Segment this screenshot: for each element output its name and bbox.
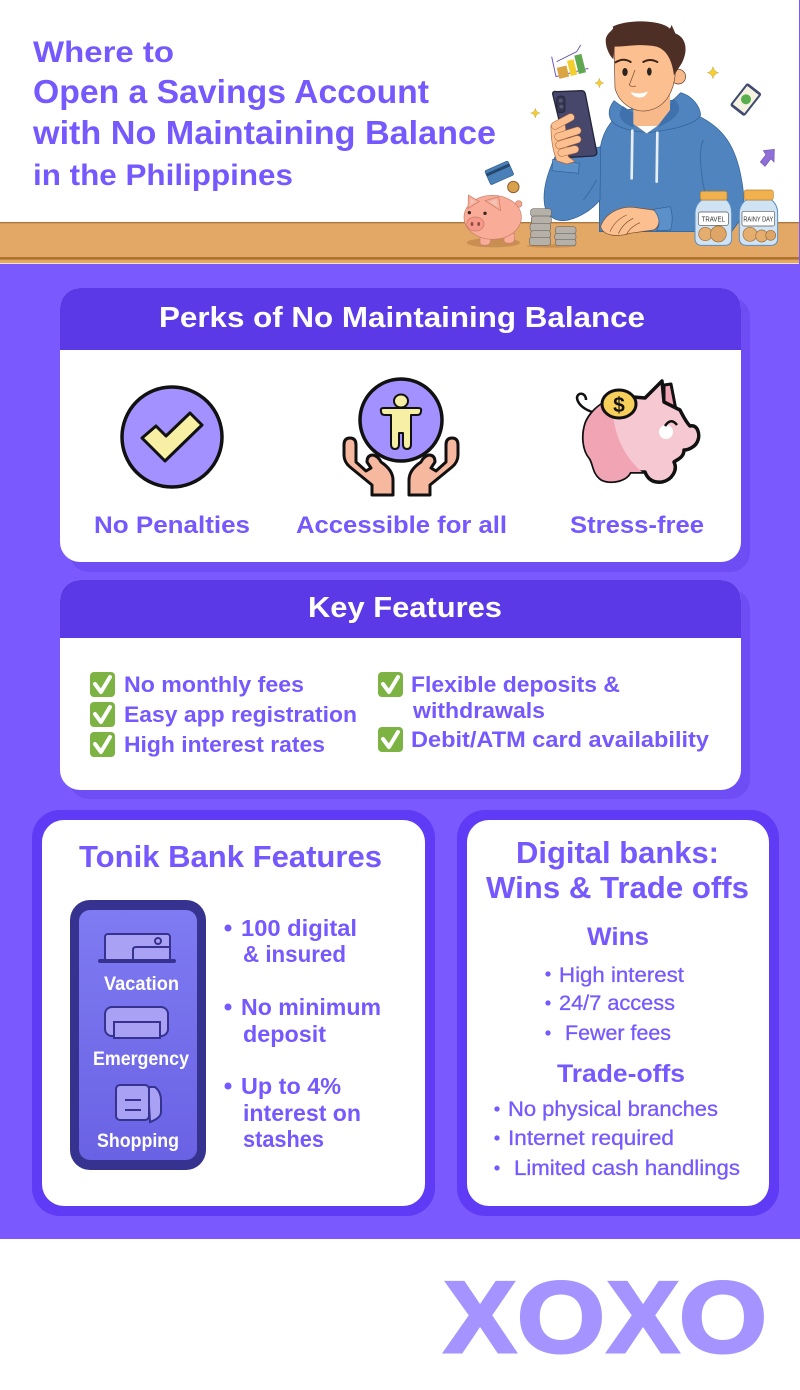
text: wins list bbox=[546, 964, 684, 1045]
jar: rainy day bbox=[739, 190, 778, 245]
text: wins list: High interest bbox=[559, 964, 684, 987]
text: tonik feature list: interest on bbox=[243, 1100, 361, 1126]
icon: piggy bank with coin bbox=[577, 381, 699, 482]
subheading: wins: Wins bbox=[587, 923, 649, 951]
text: features left column: No monthly fees bbox=[124, 672, 304, 697]
label: vacation: Vacation bbox=[104, 974, 179, 995]
jar: rainy day: RAINY DAY bbox=[743, 217, 774, 224]
icon: purple arrow bbox=[760, 149, 774, 166]
panel: tonik bank features bbox=[32, 810, 435, 1216]
text: tonik feature list: & insured bbox=[243, 941, 346, 967]
heading: digital banks bbox=[486, 835, 749, 905]
text: tonik feature list: deposit bbox=[243, 1021, 326, 1047]
logo: XOXO: O bbox=[679, 1262, 767, 1374]
icon: piggy bank with coin: $ bbox=[613, 394, 625, 417]
text: tonik feature list: stashes bbox=[243, 1126, 324, 1152]
label: shopping: Shopping bbox=[97, 1131, 179, 1152]
icon: shopping bbox=[116, 1085, 161, 1122]
heading: tonik bank features: Tonik Bank Features bbox=[79, 839, 382, 874]
icon: check circle bbox=[122, 387, 222, 487]
text: features left column bbox=[124, 672, 357, 757]
panel: digital banks wins and trade-offs bbox=[457, 810, 779, 1216]
text: features left column: Easy app registration bbox=[124, 702, 357, 727]
heading: perks: Perks of No Maintaining Balance bbox=[159, 302, 645, 334]
logo: XOXO bbox=[444, 1262, 767, 1374]
jar: travel: TRAVEL bbox=[702, 217, 725, 224]
text: tonik feature list: No minimum bbox=[241, 994, 381, 1020]
logo: XOXO: O bbox=[517, 1262, 605, 1374]
icon: small phone bbox=[730, 83, 762, 117]
text: features left column: High interest rates bbox=[124, 732, 325, 757]
title bbox=[32, 36, 496, 192]
table bbox=[0, 222, 799, 263]
title: with No Maintaining Balance bbox=[32, 114, 496, 151]
text: tonik feature list: Up to 4% bbox=[241, 1073, 341, 1099]
jar: travel bbox=[695, 191, 732, 245]
icon: check boxes bbox=[90, 672, 403, 757]
icon: vacation bbox=[100, 934, 174, 961]
man bbox=[544, 21, 744, 235]
subheading: trade-offs: Trade-offs bbox=[557, 1060, 685, 1088]
coin stacks bbox=[526, 209, 576, 248]
heading: digital banks: Wins & Trade offs bbox=[486, 870, 749, 905]
phone mockup with stashes bbox=[70, 900, 206, 1170]
icon: coin bbox=[508, 181, 519, 193]
title: in the Philippines bbox=[33, 159, 293, 192]
icon: growth chart bbox=[552, 45, 588, 79]
text: trade-offs list: No physical branches bbox=[508, 1098, 718, 1121]
icon: hands holding accessibility figure bbox=[344, 379, 458, 495]
heading: key features: Key Features bbox=[308, 592, 502, 624]
label: no penalties: No Penalties bbox=[94, 512, 250, 539]
label: accessible for all: Accessible for all bbox=[296, 512, 507, 539]
text: features right column bbox=[411, 672, 710, 752]
illustration: man with phone, piggy bank and savings jars on a table bbox=[0, 21, 799, 263]
text: trade-offs list: Internet required bbox=[508, 1127, 674, 1150]
text: features right column: Flexible deposits & bbox=[411, 672, 620, 697]
piggy bank bbox=[464, 195, 522, 247]
text: features right column: withdrawals bbox=[412, 698, 545, 723]
logo: XOXO: X bbox=[607, 1262, 679, 1374]
title: Where to bbox=[33, 36, 174, 69]
icon: emergency bbox=[105, 1007, 168, 1038]
logo: XOXO: X bbox=[444, 1262, 516, 1374]
label: stress-free: Stress-free bbox=[570, 512, 704, 539]
text: trade-offs list: Limited cash handlings bbox=[514, 1157, 740, 1180]
text: features right column: Debit/ATM card availability bbox=[411, 727, 710, 752]
text: tonik feature list bbox=[224, 915, 381, 1152]
text: tonik feature list: 100 digital bbox=[241, 915, 357, 941]
text: trade-offs list bbox=[494, 1098, 740, 1180]
panel: perks bbox=[60, 288, 750, 572]
text: wins list: 24/7 access bbox=[559, 992, 675, 1015]
text: wins list: Fewer fees bbox=[565, 1022, 671, 1045]
panel: key features bbox=[60, 580, 750, 799]
label: emergency: Emergency bbox=[93, 1049, 189, 1070]
title: Open a Savings Account bbox=[33, 73, 429, 110]
icon: sparkles bbox=[531, 67, 719, 118]
heading: digital banks: Digital banks: bbox=[516, 835, 719, 870]
icon: credit card bbox=[485, 161, 514, 185]
panel: purple background bbox=[0, 264, 800, 1239]
